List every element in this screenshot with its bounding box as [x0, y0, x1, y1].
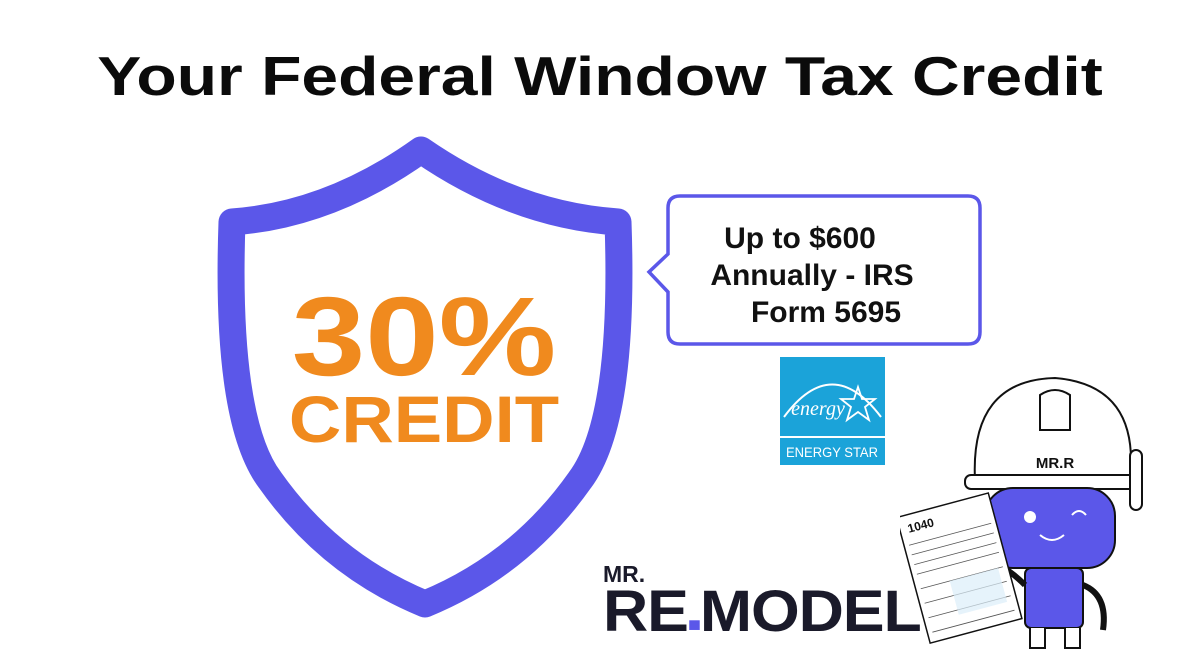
callout text	[710, 222, 914, 329]
robot mascot holding 1040 form: MR.R	[1036, 455, 1074, 472]
logo: Mr. Remodel: MR.	[603, 561, 645, 587]
callout text: Form 5695	[751, 296, 901, 329]
shield text: 30% credit: 30%	[292, 274, 556, 399]
shield text: 30% credit	[289, 274, 559, 456]
title: Your Federal Window Tax Credit	[97, 45, 1103, 107]
callout text: Up to $600	[724, 222, 876, 255]
callout bubble	[646, 194, 982, 346]
tax form: 1040	[906, 515, 936, 536]
shield text: 30% credit: CREDIT	[289, 382, 559, 456]
shield graphic	[218, 136, 632, 618]
tax form	[897, 493, 1022, 643]
icon: energy star logo: energy	[791, 398, 845, 420]
icon: energy star logo: ENERGY STAR	[786, 444, 878, 460]
icon: energy star logo	[780, 357, 885, 465]
logo: Mr. Remodel: RE■MODEL	[603, 579, 921, 644]
callout text: Annually - IRS	[710, 259, 914, 292]
robot mascot holding 1040 form	[900, 377, 1143, 649]
helmet	[965, 378, 1142, 648]
